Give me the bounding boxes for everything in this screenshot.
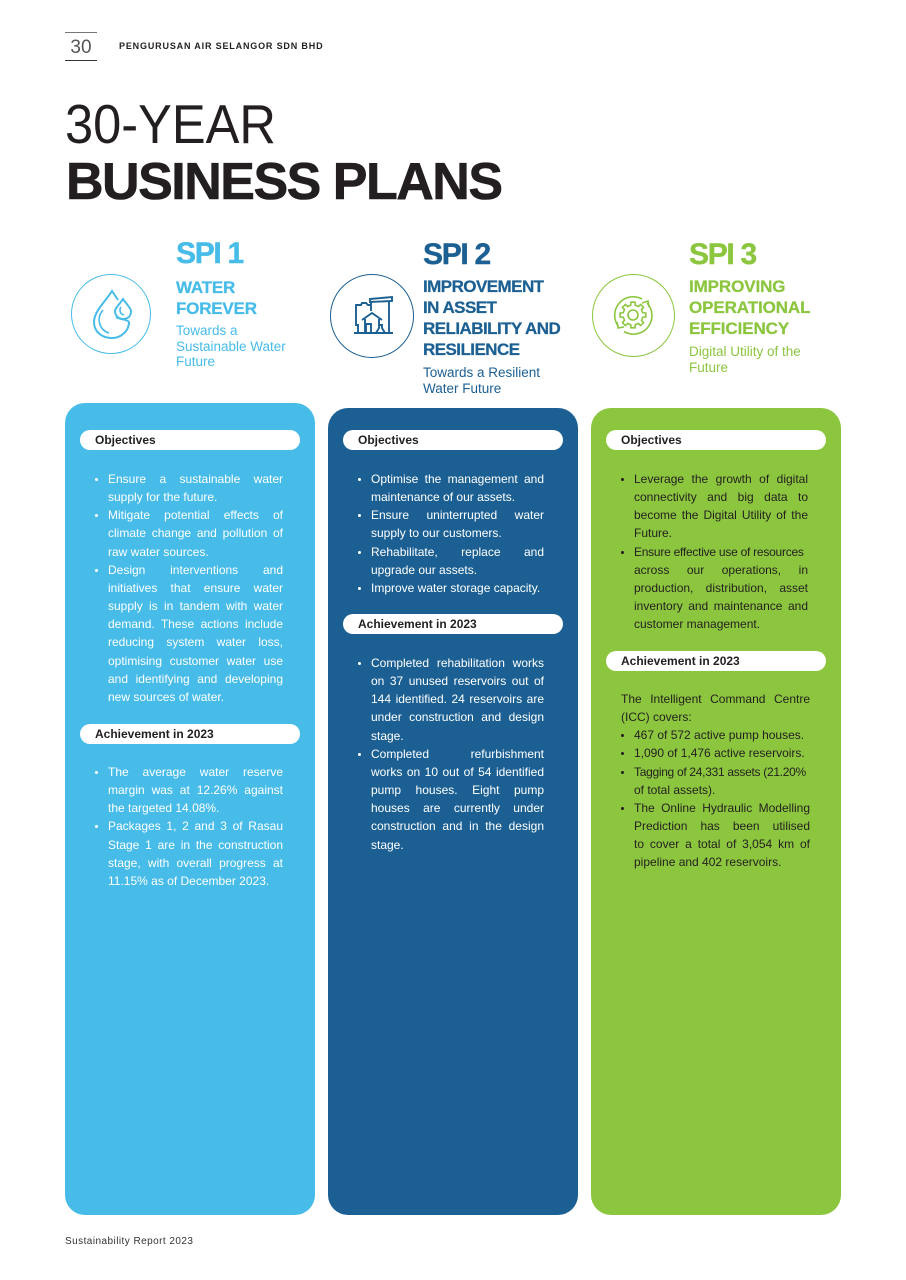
- heading: objectives: Objectives: [95, 433, 156, 447]
- heading: SPI 1: Future: [176, 354, 215, 369]
- heading: achievement: [80, 724, 300, 744]
- achievement text: of total assets).: [634, 783, 715, 797]
- achievement list: construction and in the design: [371, 819, 544, 833]
- heading: SPI 2: Towards a Resilient: [423, 365, 540, 380]
- heading: achievement: Achievement in 2023: [95, 727, 214, 741]
- achievement text: to cover a total of 3,054 km of: [634, 837, 810, 851]
- achievement list: margin was at 12.26% against: [108, 783, 283, 797]
- objectives list: [358, 472, 544, 595]
- objectives list: production, distribution, asset: [634, 581, 808, 595]
- heading: achievement: Achievement in 2023: [621, 654, 740, 668]
- achievement text: (ICC) covers:: [621, 710, 692, 724]
- heading: SPI 1: Sustainable Water: [176, 338, 286, 354]
- heading: SPI 2: Water Future: [423, 380, 501, 396]
- achievement list: Stage 1 are in the construction: [108, 838, 283, 852]
- title: [65, 93, 502, 211]
- achievement list: Completed refurbishment: [371, 747, 544, 761]
- objectives list: initiatives that ensure water: [108, 581, 283, 595]
- objectives list: Leverage the growth of digital: [634, 472, 808, 486]
- heading: objectives: [343, 430, 563, 450]
- title: BUSINESS PLANS: [66, 153, 502, 211]
- achievement text: The Intelligent Command Centre: [621, 692, 810, 706]
- achievement text: [621, 692, 810, 869]
- objectives list: maintenance of our assets.: [371, 490, 515, 504]
- heading: SPI 1: FOREVER: [176, 299, 257, 318]
- objectives list: across our operations, in: [634, 563, 808, 577]
- objectives list: reducing system water loss,: [108, 635, 283, 649]
- heading: achievement: [606, 651, 826, 671]
- achievement list: the targeted 14.08%.: [108, 801, 219, 815]
- objectives list: Ensure effective use of resources: [634, 545, 804, 559]
- objectives list: upgrade our assets.: [371, 563, 477, 577]
- objectives list: become the Digital Utility of the: [634, 508, 808, 522]
- objectives list: supply is in tandem with water: [108, 599, 283, 613]
- objectives list: and identifying and developing: [108, 672, 283, 686]
- footer: Sustainability Report 2023: [65, 1236, 193, 1247]
- objectives list: Ensure uninterrupted water: [371, 508, 544, 522]
- heading: achievement: Achievement in 2023: [358, 617, 477, 631]
- page number: [65, 32, 97, 61]
- achievement list: stage.: [371, 729, 404, 743]
- achievement list: works on 10 out of 54 identified: [371, 765, 544, 779]
- achievement text: pipeline and 402 reservoirs.: [634, 855, 781, 869]
- heading: SPI 3: SPI 3: [689, 238, 756, 271]
- objectives list: Improve water storage capacity.: [371, 581, 540, 595]
- heading: SPI 1: WATER: [176, 278, 235, 297]
- achievement list: under construction and design: [371, 710, 544, 724]
- icon: gear cycle: [592, 274, 675, 357]
- heading: SPI 2: [423, 238, 560, 396]
- heading: objectives: [80, 430, 300, 450]
- heading: SPI 2: RESILIENCE: [423, 340, 520, 359]
- objectives list: Ensure a sustainable water: [108, 472, 283, 486]
- heading: SPI 2: RELIABILITY AND: [423, 319, 560, 338]
- achievement text: 467 of 572 active pump houses.: [634, 728, 804, 742]
- objectives list: Design interventions and: [108, 563, 283, 577]
- objectives list: raw water sources.: [108, 545, 209, 559]
- heading: SPI 1: [176, 237, 286, 369]
- heading: SPI 3: OPERATIONAL: [689, 298, 810, 317]
- achievement text: 1,090 of 1,476 active reservoirs.: [634, 746, 805, 760]
- objectives list: Mitigate potential effects of: [108, 508, 283, 522]
- panel: SPI 3: [591, 408, 841, 1215]
- achievement list: houses are currently under: [371, 801, 544, 815]
- objectives list: inventory and maintenance and: [634, 599, 808, 613]
- objectives list: [621, 472, 808, 631]
- objectives list: Rehabilitate, replace and: [371, 545, 544, 559]
- objectives list: customer management.: [634, 617, 760, 631]
- achievement list: [95, 765, 283, 888]
- running header: PENGURUSAN AIR SELANGOR SDN BHD: [119, 41, 323, 51]
- objectives list: climate change and pollution of: [108, 526, 283, 540]
- heading: SPI 3: [689, 238, 810, 374]
- icon: water facility: [330, 274, 414, 358]
- achievement list: Packages 1, 2 and 3 of Rasau: [108, 819, 283, 833]
- achievement list: Completed rehabilitation works: [371, 656, 544, 670]
- achievement list: The average water reserve: [108, 765, 283, 779]
- heading: SPI 2: IMPROVEMENT: [423, 277, 544, 296]
- achievement text: Prediction has been utilised: [634, 819, 810, 833]
- achievement list: pump houses. Eight pump: [371, 783, 544, 797]
- objectives list: demand. These actions include: [108, 617, 283, 631]
- objectives list: Optimise the management and: [371, 472, 544, 486]
- achievement list: stage, with overall progress at: [108, 856, 283, 870]
- panel: SPI 2: [328, 408, 578, 1215]
- achievement list: 11.15% as of December 2023.: [108, 874, 269, 888]
- objectives list: [95, 472, 283, 704]
- heading: objectives: Objectives: [358, 433, 419, 447]
- heading: objectives: [606, 430, 826, 450]
- objectives list: supply for the future.: [108, 490, 217, 504]
- heading: objectives: Objectives: [621, 433, 682, 447]
- heading: SPI 3: EFFICIENCY: [689, 319, 789, 338]
- heading: SPI 1: Towards a: [176, 323, 238, 338]
- objectives list: new sources of water.: [108, 690, 224, 704]
- heading: achievement: [343, 614, 563, 634]
- heading: SPI 3: IMPROVING: [689, 277, 785, 296]
- achievement text: The Online Hydraulic Modelling: [634, 801, 810, 815]
- title: 30-YEAR: [65, 93, 276, 155]
- objectives list: supply to our customers.: [371, 526, 502, 540]
- objectives list: connectivity and big data to: [634, 490, 808, 504]
- heading: SPI 1: SPI 1: [176, 237, 243, 270]
- achievement list: on 37 unused reservoirs out of: [371, 674, 544, 688]
- achievement text: Tagging of 24,331 assets (21.20%: [634, 765, 806, 779]
- icon: water drops: [71, 274, 151, 354]
- objectives list: Future.: [634, 526, 672, 540]
- achievement list: 144 identified. 24 reservoirs are: [371, 692, 544, 706]
- objectives list: optimising customer water use: [108, 654, 283, 668]
- achievement list: [358, 656, 544, 852]
- achievement list: stage.: [371, 838, 404, 852]
- heading: SPI 2: SPI 2: [423, 238, 490, 271]
- heading: SPI 3: Digital Utility of the: [689, 344, 801, 359]
- panel: SPI 1: [65, 403, 315, 1215]
- heading: SPI 3: Future: [689, 360, 728, 374]
- page number: 30: [70, 37, 92, 58]
- heading: SPI 2: IN ASSET: [423, 298, 496, 317]
